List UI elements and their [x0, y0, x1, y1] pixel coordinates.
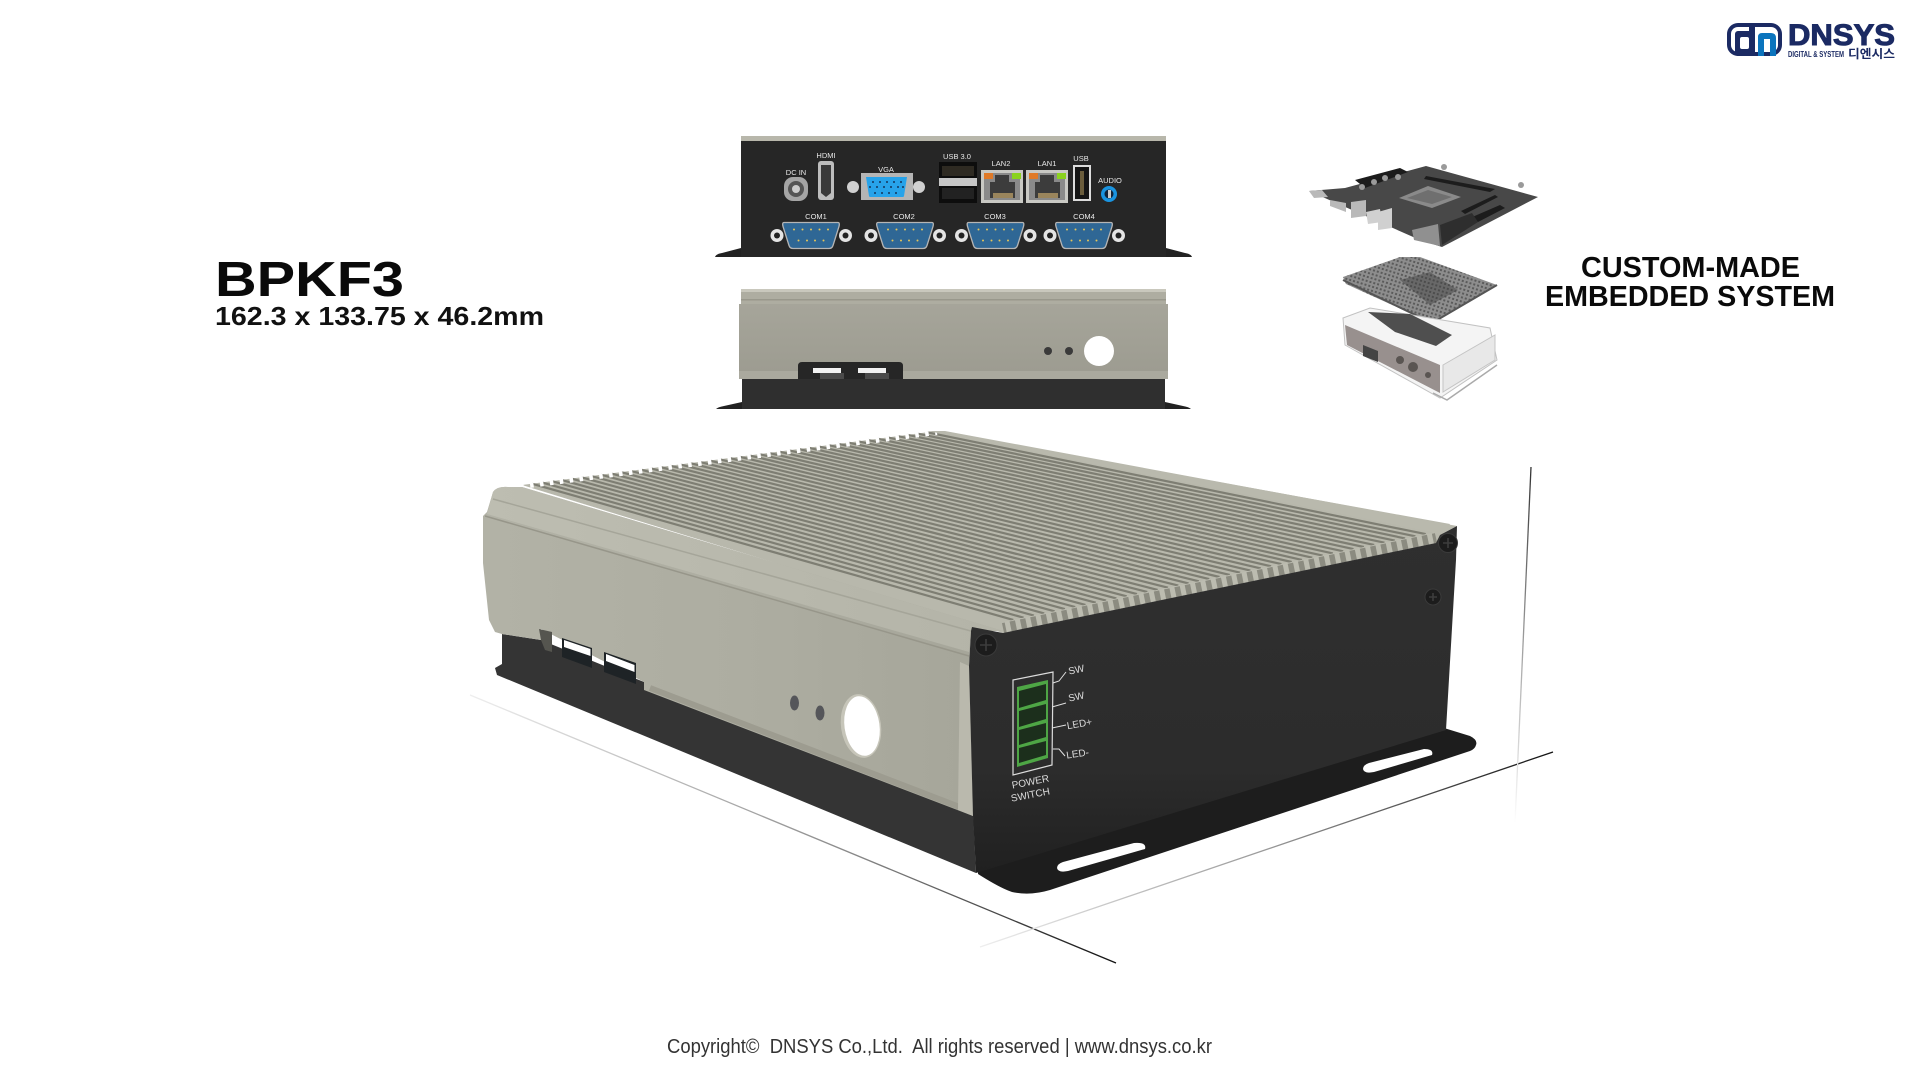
LEDs: [1044, 347, 1073, 355]
rear panel view with ports: COM1: [805, 212, 827, 221]
port: VGA: [847, 173, 925, 200]
heading: custom-made embedded system: EMBEDDED SYSTEM: [1545, 281, 1835, 313]
rear panel view with ports: AUDIO: [1098, 176, 1122, 185]
power button: [1084, 336, 1114, 366]
rear panel view with ports: LAN1: [1038, 159, 1056, 168]
rear panel view with ports: COM3: [984, 212, 1006, 221]
rear panel view with ports: [715, 136, 1192, 257]
port: LAN2: [981, 170, 1023, 203]
rear panel view with ports: LAN2: [992, 159, 1010, 168]
USB slots: [813, 368, 889, 379]
rear panel view with ports: USB: [1073, 154, 1089, 163]
rear panel view with ports: USB 3.0: [943, 152, 971, 161]
logo: DNSYS: 디엔시스: [1848, 47, 1895, 61]
green power switch connector: [1013, 672, 1053, 775]
logo: DNSYS: DNSYS: [1788, 19, 1895, 52]
rear panel view with ports: COM4: [1073, 212, 1095, 221]
text: dimensions: 162.3 x 133.75 x 46.2mm: [215, 301, 544, 331]
port: COM1: [770, 222, 852, 248]
logo: DNSYS: [1727, 19, 1895, 61]
image: transparent enclosure: [1343, 308, 1497, 400]
footer copyright: Copyright© DNSYS Co.,Ltd. All rights reserved | www.dnsys.co.kr: [667, 1036, 1212, 1058]
board and exploded enclosure illustrations: [1309, 164, 1538, 400]
port: audio: [1101, 186, 1117, 202]
connector labels: [1010, 663, 1093, 805]
rear panel view with ports: COM2: [893, 212, 915, 221]
port: COM3: [955, 222, 1036, 248]
port: COM2: [864, 222, 946, 248]
heading: custom-made embedded system: [1545, 252, 1835, 313]
connector labels: POWER: [1011, 774, 1050, 792]
port: DC in: [784, 177, 808, 201]
mounting flange: [978, 728, 1476, 894]
dimension axis lines: [470, 467, 1553, 963]
port: USB 3.0: [939, 162, 977, 203]
connector labels: LED+: [1066, 717, 1093, 732]
front panel view: [716, 289, 1191, 409]
heading: model name: BPKF3: [215, 253, 404, 307]
rear panel view with ports: VGA: [878, 165, 894, 174]
image: mainboard: [1309, 164, 1538, 247]
connector leader lines: [1052, 672, 1066, 756]
front power button: [837, 692, 885, 760]
port: COM4: [1044, 222, 1125, 248]
port: USB: [1073, 165, 1091, 201]
logo: DNSYS: DIGITAL & SYSTEM: [1788, 50, 1844, 59]
main product 3D view: [483, 431, 1476, 894]
screws: [975, 534, 1458, 656]
connector labels: SW: [1067, 663, 1086, 678]
front USB ports: [539, 629, 636, 684]
right side black panel: [969, 526, 1457, 873]
connector labels: LED-: [1066, 747, 1090, 762]
port: HDMI: [818, 161, 834, 200]
silver front face: [483, 487, 1003, 816]
connector labels: SWITCH: [1010, 786, 1051, 805]
front LEDs: [790, 696, 824, 720]
heading: custom-made embedded system: CUSTOM-MADE: [1581, 252, 1800, 284]
rear panel view with ports: HDMI: [816, 151, 836, 160]
rear panel view with ports: DC IN: [786, 168, 806, 177]
black lower front: [495, 634, 976, 873]
connector labels: SW: [1067, 690, 1086, 705]
port: LAN1: [1026, 170, 1068, 203]
heat sink fins: [522, 431, 1457, 633]
image: heat sink plate: [1343, 257, 1497, 323]
